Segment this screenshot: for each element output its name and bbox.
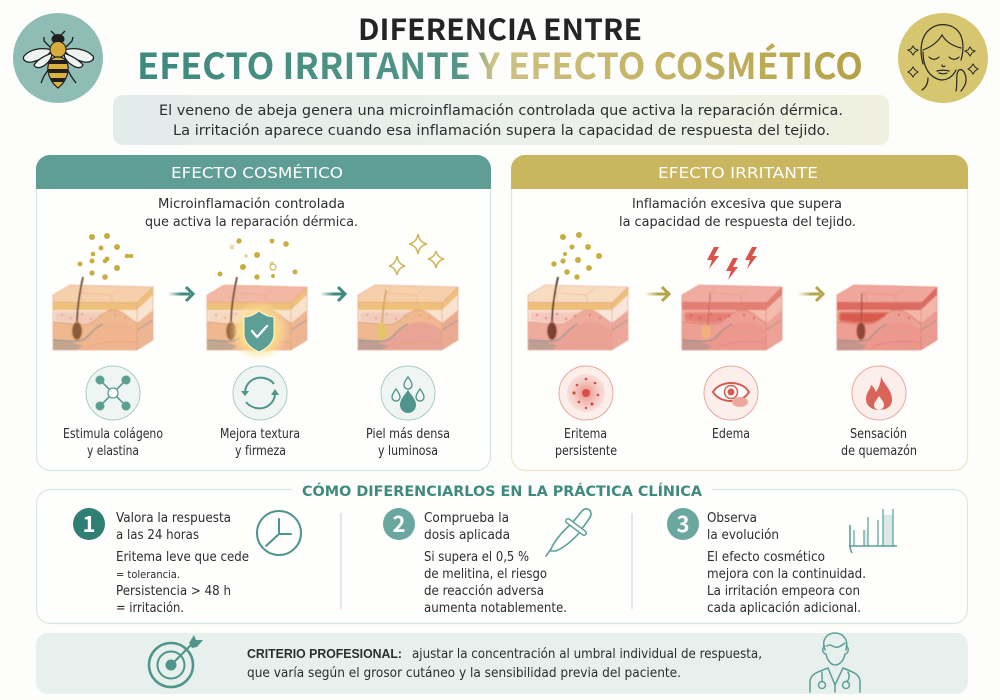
icon: bar chart	[849, 509, 897, 553]
label: sensación de quemazón: Sensación	[850, 427, 907, 442]
icon: cycle arrows	[233, 366, 287, 420]
icon: target with arrow	[149, 635, 203, 687]
skin block 6	[837, 285, 937, 350]
heading: efecto cosmético	[36, 155, 491, 189]
badge 3	[667, 507, 699, 540]
step 3 text: la evolución	[707, 528, 779, 543]
step 2 text: Si supera el 0,5 %	[424, 550, 529, 565]
divider 1	[340, 513, 342, 609]
step 2	[383, 507, 591, 616]
text: criterio profesional	[247, 646, 762, 681]
arrow	[168, 287, 193, 301]
step 2 text: aumenta notablemente.	[424, 601, 567, 616]
step 1 text	[116, 511, 249, 616]
step 2 text	[424, 511, 567, 616]
title: EFECTO IRRITANTE Y EFECTO COSMÉTICO	[137, 38, 863, 90]
step 1	[73, 507, 301, 616]
badge 2: 2	[393, 507, 405, 539]
step 3 text: Observa	[707, 511, 757, 526]
text: irritant description: Inflamación excesiva que supera	[632, 196, 842, 212]
step 1 text: a las 24 horas	[116, 528, 199, 543]
text: cosmetic description: Microinflamación controlada	[158, 196, 345, 212]
divider 2	[632, 513, 633, 609]
icon: erythema	[559, 366, 613, 420]
step 2 text: Comprueba la	[424, 511, 509, 526]
badge 3: 3	[677, 507, 689, 539]
icon: water drops	[381, 366, 435, 420]
label: mejora textura: y firmeza	[235, 444, 286, 459]
intro text block	[113, 95, 889, 145]
label: eritema persistente: persistente	[555, 444, 617, 459]
label: mejora textura: Mejora textura	[220, 427, 300, 442]
label: piel más densa: y luminosa	[378, 444, 438, 459]
text: criterio profesional: que varía según el grosor cutáneo y la sensibilidad previa del paciente.	[247, 666, 681, 681]
skin block 5	[682, 285, 782, 350]
title: DIFERENCIA ENTRE	[358, 7, 642, 49]
text: cosmetic description: que activa la reparación dérmica.	[145, 214, 358, 230]
skin block 1	[53, 277, 153, 350]
skin block 3	[358, 285, 458, 350]
badge 2	[383, 507, 415, 540]
step 1 text: = tolerancia.	[116, 568, 180, 581]
text: criterio profesional: ajustar la concentración al umbral individual de respuesta,	[412, 647, 762, 662]
panel: efecto cosmético	[36, 155, 491, 470]
icon: lightning bolts	[707, 247, 757, 280]
label: estimula colágeno	[63, 427, 163, 459]
label: mejora textura	[220, 427, 300, 459]
badge 1: 1	[83, 507, 95, 539]
heading: efecto irritante: EFECTO IRRITANTE	[658, 164, 818, 182]
label: sensación de quemazón	[841, 427, 917, 459]
text: cosmetic description	[145, 196, 358, 230]
icon: shield	[229, 301, 289, 361]
icon: flame	[852, 366, 906, 420]
label: eritema persistente: Eritema	[564, 427, 607, 442]
icon: clock	[257, 511, 301, 555]
heading: efecto cosmético: EFECTO COSMÉTICO	[171, 163, 343, 182]
skin block 2 with shield	[207, 277, 307, 361]
step 1 text: Persistencia > 48 h	[116, 584, 231, 599]
panel: clinical practice	[36, 482, 968, 624]
arrow	[320, 287, 345, 301]
skin block 4	[528, 277, 628, 350]
step 3	[667, 507, 897, 616]
label: estimula colágeno: Estimula colágeno	[63, 427, 163, 442]
arrow	[645, 287, 669, 301]
step 3 text	[707, 511, 866, 616]
panel: efecto irritante	[511, 155, 968, 470]
text: irritant description: la capacidad de respuesta del tejido.	[619, 214, 856, 230]
label: piel más densa	[366, 427, 450, 459]
heading: cómo diferenciarlos: CÓMO DIFERENCIARLOS EN LA PRÁCTICA CLÍNICA	[302, 482, 703, 500]
label: eritema persistente	[555, 427, 617, 459]
step 3 text: El efecto cosmético	[707, 550, 825, 565]
icon: doctor	[810, 633, 860, 692]
icon: face with sparkles	[898, 13, 988, 103]
step 3 text: cada aplicación adicional.	[707, 601, 861, 616]
step 1 text: Valora la respuesta	[116, 511, 231, 526]
label: sensación de quemazón: de quemazón	[841, 444, 917, 459]
heading: efecto irritante	[511, 155, 968, 189]
step 2 text: dosis aplicada	[424, 528, 510, 543]
step 2 text: de reacción adversa	[424, 584, 544, 599]
label: estimula colágeno: y elastina	[87, 444, 139, 459]
icon: collagen network	[86, 366, 140, 420]
text: criterio profesional: CRITERIO PROFESIONAL:	[247, 646, 402, 661]
icon: sparkles	[389, 234, 444, 275]
panel: criterio profesional	[36, 633, 968, 694]
arrow	[798, 287, 823, 301]
icon: dropper	[546, 509, 591, 556]
step 1 text: = irritación.	[116, 601, 184, 616]
particles: venom drops 2	[218, 238, 298, 290]
particles: venom drops 3	[551, 232, 602, 292]
text: irritant description	[619, 196, 856, 230]
icon: bee	[13, 13, 103, 103]
particles: venom drops 1	[78, 233, 133, 292]
step 2 text: de melitina, el riesgo	[424, 567, 547, 582]
label: piel más densa: Piel más densa	[366, 427, 450, 442]
intro text block: El veneno de abeja genera una microinflamación controlada que activa la reparación dérmica.	[159, 103, 843, 119]
badge 1	[73, 507, 105, 540]
step 3 text: mejora con la continuidad.	[707, 567, 866, 582]
label: edema: Edema	[712, 427, 750, 442]
step 1 text: Eritema leve que cede	[116, 550, 249, 565]
icon: swollen eye	[704, 366, 758, 420]
step 3 text: La irritación empeora con	[707, 584, 860, 599]
title	[137, 7, 863, 90]
intro text block: La irritación aparece cuando esa inflamación supera la capacidad de respuesta del tejido.	[173, 123, 830, 139]
